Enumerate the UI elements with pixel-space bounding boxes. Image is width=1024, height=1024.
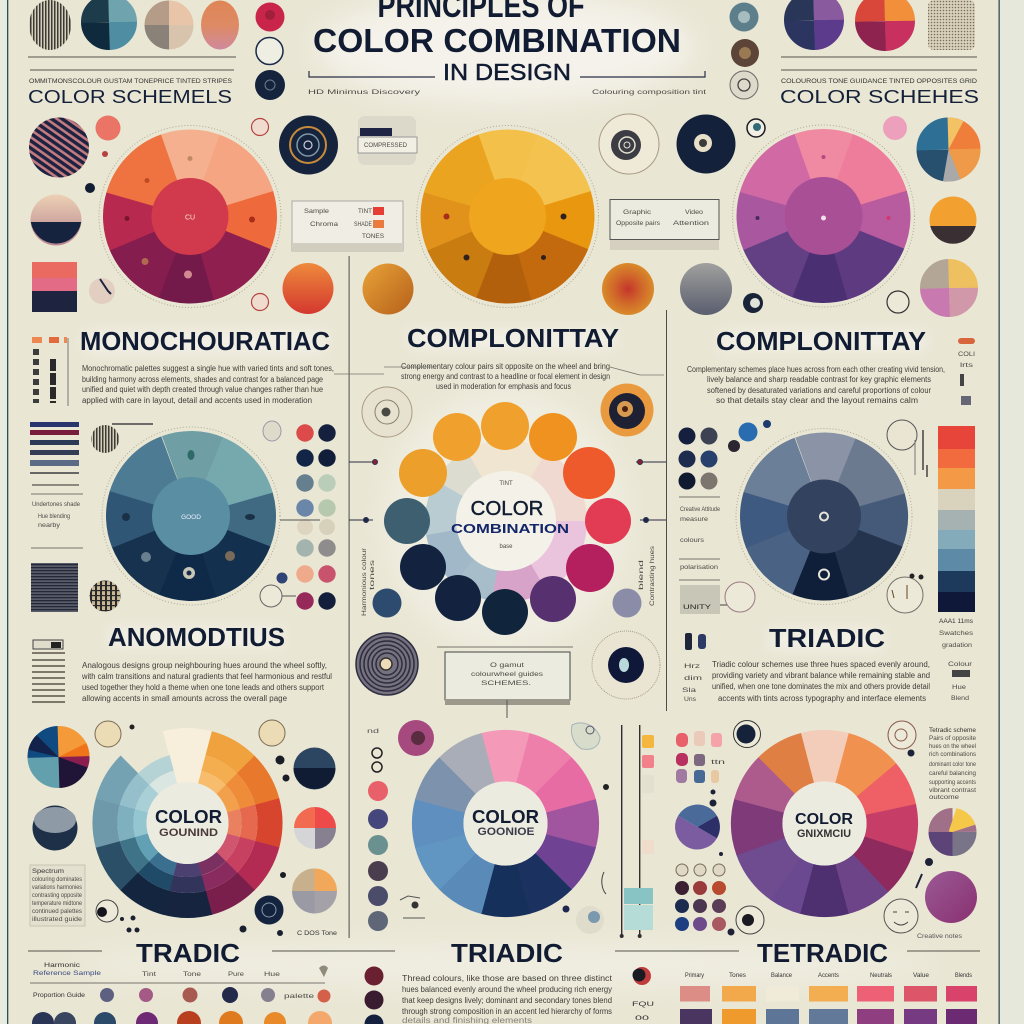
small text block: measure: [680, 517, 709, 523]
card: legend: Video: [685, 210, 704, 216]
body text: softened by desaturated variations and careful proportions of colour: [707, 386, 931, 395]
card: legend: [292, 201, 403, 252]
icon: ring: [747, 119, 765, 137]
icon: quadrant circle: [937, 817, 968, 847]
panel: top left header: [28, 0, 285, 107]
icon: dark ring: [743, 293, 763, 313]
center label: TINT: [499, 481, 513, 487]
icon: teal dot: [730, 2, 758, 32]
icon: orange ball: [362, 264, 414, 314]
heading: complementary: COMPLONITTAY: [716, 326, 926, 356]
body text: unified and quiet with depth created through value changes rather than hue: [82, 385, 323, 394]
icon: quadrant circle: [304, 818, 326, 838]
body text: Triadic colour schemes use three hues spaced evenly around,: [712, 660, 930, 669]
wheel label: GNIXMCIU: [797, 828, 851, 840]
body text: Analogous designs group neighbouring hues around the wheel softly,: [82, 661, 327, 670]
icon: beige quadrant circle: [157, 13, 181, 37]
body text: [687, 365, 945, 405]
icon: mosaic circle: [928, 129, 969, 170]
card: legend: Attention: [673, 221, 709, 227]
label row: Pure: [228, 972, 245, 978]
body text: with calm transitions and natural gradients that feel harmonious and restful: [81, 672, 332, 681]
vertical small text: Contrasting hues: [650, 546, 656, 606]
body text: allowing accents in small amounts across the overall page: [82, 694, 287, 703]
swatch labels: Balance: [771, 973, 793, 979]
icons: small pink rings: [252, 118, 268, 310]
card: note: [437, 647, 573, 705]
card: legend: SHADE: [354, 222, 372, 228]
color wheel: magenta: [732, 125, 914, 307]
heading: triadic: TRIADIC: [769, 623, 885, 653]
icon: dark circle: [676, 114, 736, 174]
vertical small text: [362, 546, 656, 616]
mini icons: Uns: [684, 697, 696, 703]
wheel label: [155, 807, 222, 839]
color dots: [296, 424, 336, 610]
small text block: colours: [680, 538, 704, 544]
sample row: palette: [284, 994, 315, 1000]
icons: small marks: nd: [367, 729, 379, 735]
swatch column: [624, 735, 654, 930]
mini notes: Colour: [948, 662, 972, 668]
wheel label: [795, 811, 853, 840]
small icon column: 00: [635, 1016, 650, 1022]
label row: Harmonic: [44, 963, 80, 969]
wheel label: COLOR: [155, 807, 222, 827]
card: legend: Graphic: [623, 210, 651, 216]
icon: woven ball: [90, 580, 120, 612]
icon: salmon dot: [96, 116, 120, 140]
image card: [680, 585, 730, 614]
icon: ring with eye: [736, 906, 764, 934]
small notes: [120, 916, 338, 937]
swatch labels: Tones: [729, 973, 746, 979]
small icon column: [632, 967, 654, 1022]
small text block: [679, 497, 721, 580]
icon: sketched dot: [89, 278, 115, 304]
label row: Tint: [142, 972, 156, 978]
body text: [402, 974, 613, 1024]
mini legend: lrts: [960, 363, 973, 369]
icon: outline ring: [887, 291, 909, 313]
small text block: [929, 728, 977, 801]
mini icons: Hrz: [684, 664, 700, 670]
label row: Tone: [183, 972, 202, 978]
card: legend: Sample: [304, 209, 330, 215]
color wheel: multi ring: [71, 706, 304, 940]
small text block: outcome: [929, 795, 960, 801]
mini icons: [682, 633, 706, 703]
small table: continued palettes: [32, 909, 82, 915]
icon: sand circle: [303, 880, 326, 902]
color dots: [678, 428, 718, 490]
icon: navy sphere: [294, 748, 336, 790]
wheel label: [472, 807, 539, 838]
icon: plum dot: [398, 720, 434, 756]
icon: dark ring: [734, 720, 760, 748]
small caption: COLOUROUS TONE GUIDANCE TINTED OPPOSITES GRID: [781, 79, 978, 85]
small text block: careful balancing: [929, 771, 976, 777]
icon: dotted swatch: [928, 0, 975, 50]
body text: Complementary colour pairs sit opposite on the wheel and bring: [401, 362, 610, 371]
body text: through strong composition in an accent led hierarchy of forms: [402, 1007, 612, 1016]
icon: pie circle: [38, 736, 79, 778]
swatch labels: Neutrals: [870, 973, 892, 979]
body text: strong energy and contrast to a headline or focal element in design: [401, 372, 610, 381]
panel: monochromatic: [29, 116, 417, 406]
title: [308, 0, 707, 96]
small text block: hues on the wheel: [929, 744, 976, 750]
card: note: O gamut: [490, 663, 524, 669]
top dot grid: ttn: [711, 760, 725, 766]
mini legend: [958, 338, 975, 405]
icon: blue purple pie: [682, 812, 713, 842]
mini icons: dim: [684, 676, 702, 682]
swatch labels: Primary: [685, 973, 704, 979]
small caption: Swatches: [939, 631, 973, 637]
stacked color bar: [938, 426, 975, 612]
icon: plum ball: [925, 871, 977, 923]
panel: bottom left legend: [30, 963, 332, 1024]
connectors: [349, 460, 666, 522]
small text block: vibrant contrast: [929, 788, 976, 794]
icon: sunset circle: [930, 196, 976, 244]
title: HD Minimus Discovery: [308, 90, 420, 96]
color wheel: red: [99, 126, 281, 308]
color wheel: slate: [736, 428, 912, 604]
top dot grid: [676, 731, 725, 783]
body text: hues balanced evenly around the wheel producing rich energy: [402, 985, 612, 994]
small text block: polarisation: [680, 565, 718, 571]
icon: textured orange ball: [602, 263, 654, 315]
stripe swatches: [30, 422, 79, 486]
icon: navy dial: [254, 896, 284, 924]
center label: COMBINATION: [451, 521, 569, 536]
mini legend: [32, 337, 68, 406]
small caption: AAA1 11ms: [939, 619, 973, 625]
label row: [33, 963, 328, 978]
panel: center color combination: [349, 384, 666, 718]
icon: sunset circle: [30, 194, 82, 246]
panel: complementary center: [334, 114, 719, 391]
small text block: supporting accents: [929, 780, 976, 786]
small notes: C DOS Tone: [297, 931, 338, 937]
sample row: Proportion Guide: [33, 993, 86, 999]
icon: orange target: [600, 384, 654, 436]
icon: striped circle: [29, 118, 89, 178]
icon: pink dot: [883, 116, 907, 140]
wheel label: COLOR: [795, 811, 853, 828]
card: legend: TONES: [362, 234, 384, 240]
body text: [712, 660, 930, 703]
icon: concentric rings: [356, 633, 418, 695]
icon: tiny dots: [85, 151, 108, 193]
small text block: Pairs of opposite: [929, 736, 977, 742]
heading: color schemes: COLOR SCHEHES: [780, 87, 979, 107]
wheel label: COLOR: [472, 807, 539, 827]
center label: COLOR: [470, 498, 544, 520]
color dots column: [368, 781, 388, 931]
small caption: [939, 619, 973, 649]
small table: variations harmonies: [32, 885, 82, 891]
small text block: Tetradic scheme: [929, 728, 977, 734]
panel: bottom center wheel: [364, 720, 739, 1024]
title: Colouring composition tint: [592, 90, 707, 96]
small text block: nearby: [38, 523, 60, 529]
panel: triadic middle right: [678, 420, 975, 703]
icon: grey ball: [680, 263, 732, 315]
color wheel: sunset purple: [729, 728, 920, 919]
heading: analogous: ANOMODTIUS: [108, 622, 285, 652]
image card: UNITY: [683, 605, 711, 611]
panel: top right header: [730, 0, 979, 107]
sample row: [33, 987, 330, 1003]
mini notes: Hue: [952, 685, 967, 691]
body text: [82, 364, 334, 405]
color wheel: teal navy: [102, 427, 280, 605]
body text: used together they hold a theme when one tone leads and others support: [82, 683, 325, 692]
small text block: dominant color tone: [929, 762, 977, 768]
title: IN DESIGN: [443, 59, 571, 85]
title: COLOR COMBINATION: [313, 22, 681, 59]
vertical small text: Harmonious colour: [362, 548, 368, 616]
icon: navy dot: [255, 70, 285, 100]
small table: temperature midtone: [32, 901, 83, 907]
wheel label: GOONIOE: [478, 826, 534, 838]
icons: cream rings: [95, 720, 290, 878]
icon: dark ringed circle: [279, 116, 338, 174]
card: legend: Chroma: [310, 222, 339, 228]
color wheel: red: CU: [185, 214, 195, 222]
small caption: gradation: [942, 643, 972, 649]
card: small sample: COMPRESSED: [364, 143, 408, 149]
vertical small text: blend: [639, 560, 645, 590]
icons: outline rings: [725, 574, 924, 613]
label row: Hue: [264, 972, 281, 978]
small table: illustrated guide: [32, 917, 83, 923]
texture swatch: [31, 563, 78, 612]
card: small sample: [358, 116, 417, 165]
pale inner ring: [419, 434, 593, 608]
small text block: Creative Attitude: [680, 507, 721, 513]
small table: contrasting opposite: [32, 893, 83, 899]
label row: Reference Sample: [33, 971, 102, 977]
panel: bottom left wheel: [28, 706, 395, 968]
body text: accents with tints across typography and interface elements: [718, 694, 926, 703]
heading: complementary: COMPLONITTAY: [407, 323, 619, 353]
card: legend: Opposite pairs: [616, 221, 660, 227]
card: legend: TINT: [358, 209, 372, 215]
panel: complementary right: [676, 114, 976, 405]
icon: teal quadrant circle: [95, 8, 123, 36]
icon: pale ring: [730, 71, 758, 99]
small text block: Undertones shade: [32, 502, 81, 508]
icons: small marks: [367, 729, 382, 772]
small icon column: FQU: [632, 1002, 654, 1008]
body text: building harmony across elements, shades and contrast for a balanced page: [82, 375, 323, 384]
icon: target ring: [96, 900, 118, 922]
petals: [384, 402, 631, 635]
bottom dot grid: [675, 864, 726, 931]
icon: slate sphere: [32, 806, 78, 850]
center label: [451, 481, 569, 550]
body text: so that details stay clear and the layout remains calm: [716, 396, 918, 405]
icon: hatched circle: [91, 424, 153, 453]
heading: tetradic: TETRADIC: [757, 938, 888, 968]
icon: purple quadrant circle: [799, 5, 829, 35]
vertical rules: [620, 725, 642, 938]
icons: outline rings: [884, 721, 918, 933]
small text block: Hue blending: [38, 514, 70, 520]
bottom dots: [32, 1011, 332, 1024]
body text: Thread colours, like those are based on three distinct: [402, 974, 613, 983]
heading: triadic: TRADIC: [136, 938, 240, 968]
color wheel: teal navy: GOOD: [181, 514, 201, 521]
small caption: OMMITMONSCOLOUR GUSTAM TONEPRICE TINTED STRIPES: [29, 79, 232, 85]
icon: mosaic circle lower: [934, 274, 964, 302]
heading: color schemes: COLOR SCHEMELS: [28, 87, 232, 107]
body text: [81, 661, 332, 703]
icon: cream sketch: [362, 387, 412, 437]
body text: providing variety and vibrant balance while remaining stable and: [712, 671, 930, 680]
body text: applied with care in layout, detail and accents used in moderation: [82, 396, 312, 405]
icons: small sketched marks: [728, 420, 927, 477]
mini notes: [948, 662, 972, 702]
icons: sketches: [400, 723, 609, 934]
small text block: [31, 494, 83, 548]
card: note: colourwheel guides: [471, 672, 543, 678]
icons: dots column: [364, 966, 384, 1024]
body text: that keep designs lively; dominant and secondary tones blend: [402, 996, 612, 1005]
body text: [401, 362, 610, 391]
small text block: rich combinations: [929, 752, 976, 758]
wheel label: GOUNIND: [159, 827, 218, 839]
swatch labels: Value: [913, 973, 930, 979]
body text: used in moderation for emphasis and focus: [436, 382, 571, 391]
icon: orange pink oval: [201, 0, 239, 50]
panel: analogous: [30, 421, 336, 703]
mini notes: Blend: [951, 696, 969, 702]
icon: sketched spiral: [599, 114, 659, 174]
icon: hatched swatch: [29, 0, 71, 50]
icon: brown dot: [731, 39, 759, 67]
mini icons: Sla: [682, 688, 697, 694]
small table: colouring dominates: [32, 877, 82, 883]
card: note: SCHEMES.: [481, 681, 532, 687]
card: legend: [610, 200, 719, 250]
mini legend: COLI: [958, 352, 975, 358]
vertical small text: tones: [370, 560, 376, 590]
small table: Spectrum: [32, 869, 64, 875]
color wheel: amber: [416, 126, 598, 308]
panel: bottom right wheel: [620, 720, 980, 1024]
body text: lively balance and sharp readable contrast for key graphic elements: [707, 375, 931, 384]
body text: unified, when one tone dominates the mix and others provide detail: [712, 682, 930, 691]
swatch: striped flag: [32, 262, 77, 312]
swatch labels: [685, 973, 972, 979]
heading: triadic: TRIADIC: [451, 938, 563, 968]
icon: orange red ball: [282, 263, 334, 314]
swatch labels: Blends: [955, 973, 972, 979]
icon: white ring: [256, 38, 283, 64]
small caption: Creative notes: [917, 934, 962, 940]
body text: Monochromatic palettes suggest a single hue with varied tints and soft tones,: [82, 364, 334, 373]
small table: [30, 865, 85, 926]
icon: dotted target: [592, 631, 660, 699]
color wheel: pink blue: [410, 728, 601, 919]
icon: red dot: [256, 2, 284, 32]
center label: base: [499, 544, 513, 550]
heading: monochromatic: MONOCHOURATIAC: [80, 326, 330, 356]
icon: red orange quadrant circle: [870, 6, 900, 36]
swatch table: [680, 986, 977, 1024]
swatch labels: Accents: [818, 973, 839, 979]
icons: blue and lilac dots: [372, 588, 642, 618]
icons: small sketched marks: [260, 421, 320, 607]
mini legend: [32, 640, 65, 702]
body text: Complementary schemes place hues across from each other creating vivid tension,: [687, 365, 945, 374]
small dots: [710, 750, 933, 936]
